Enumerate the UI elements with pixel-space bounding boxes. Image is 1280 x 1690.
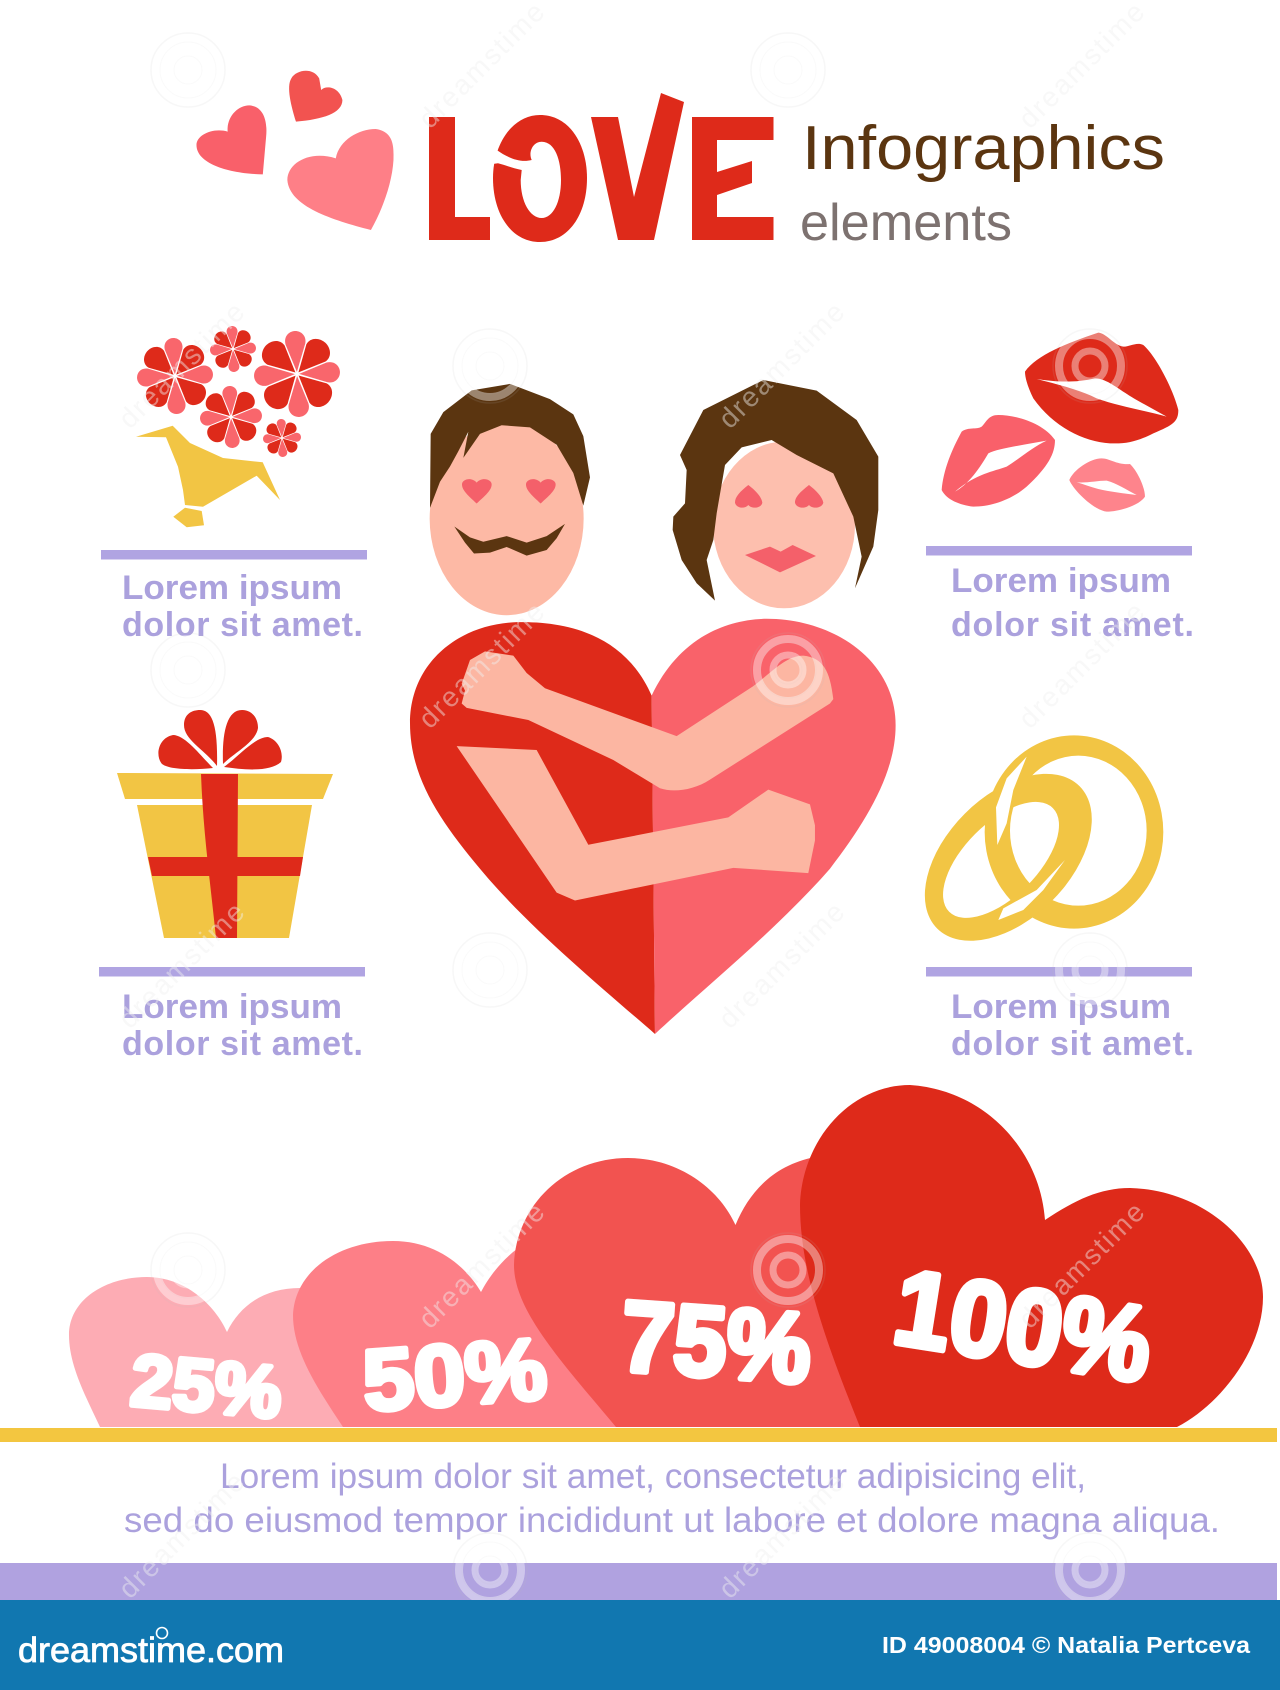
heart 25 xyxy=(69,1277,360,1427)
footer logo: dreamstime.com xyxy=(18,1631,284,1670)
caption: Lorem ipsum xyxy=(122,569,342,607)
subtitle: elements: elements xyxy=(800,194,1012,252)
footer bar xyxy=(0,1600,1280,1690)
panel: gift xyxy=(99,710,365,1063)
title hearts xyxy=(196,71,394,230)
caption: Lorem ipsum xyxy=(122,988,342,1026)
watermark spirals xyxy=(151,33,1127,1607)
watermark text xyxy=(112,0,1152,1604)
divider bar xyxy=(926,967,1192,976)
man head xyxy=(430,384,590,615)
caption: Lorem ipsum xyxy=(951,562,1171,600)
caption xyxy=(951,988,1194,1063)
title: Infographics: Infographics xyxy=(802,114,1165,183)
label: 50%: 50% xyxy=(360,1320,550,1430)
watermark text: dreamstime xyxy=(712,895,852,1034)
icon: wedding rings xyxy=(894,735,1163,972)
icon: flowers xyxy=(135,325,342,458)
arm: upper xyxy=(462,651,833,790)
title: LOVE lettering xyxy=(429,93,774,242)
caption: dolor sit amet. xyxy=(951,1025,1194,1063)
heart body xyxy=(410,619,896,1034)
watermark text: dreamstime xyxy=(112,1465,252,1604)
caption xyxy=(122,569,363,644)
heart 50 xyxy=(293,1240,620,1427)
paragraph: sed do eiusmod tempor incididunt ut labore et dolore magna aliqua. xyxy=(124,1501,1220,1540)
central illustration: hugging couple xyxy=(410,380,896,1034)
divider bar xyxy=(926,546,1192,556)
icon: bouquet wrapper xyxy=(136,426,280,527)
caption: Lorem ipsum xyxy=(951,988,1171,1026)
caption xyxy=(951,562,1194,644)
panel: bouquet xyxy=(101,325,367,644)
label: 25%: 25% xyxy=(128,1338,285,1434)
watermark text: dreamstime xyxy=(412,1195,552,1334)
watermark text: dreamstime xyxy=(712,1465,852,1604)
paragraph xyxy=(124,1457,1220,1540)
divider bar xyxy=(99,967,365,976)
footer credit: ID 49008004 © Natalia Pertceva xyxy=(882,1632,1250,1658)
caption: dolor sit amet. xyxy=(122,1025,363,1063)
baseline bar xyxy=(0,1428,1277,1442)
label: 75%: 75% xyxy=(617,1280,815,1405)
label: 100%: 100% xyxy=(886,1246,1160,1405)
caption: dolor sit amet. xyxy=(122,606,363,644)
watermark text: dreamstime xyxy=(112,295,252,434)
caption xyxy=(122,988,363,1063)
panel: kisses xyxy=(926,333,1194,644)
watermark text: dreamstime xyxy=(1012,595,1152,734)
heart 100 xyxy=(800,1085,1263,1427)
watermark text: dreamstime xyxy=(412,595,552,734)
paragraph: Lorem ipsum dolor sit amet, consectetur adipisicing elit, xyxy=(220,1457,1086,1496)
progress hearts xyxy=(69,1085,1263,1427)
watermark text: dreamstime xyxy=(112,895,252,1034)
lilac band xyxy=(0,1563,1277,1600)
heart 75 xyxy=(514,1157,875,1427)
divider bar xyxy=(101,550,367,560)
icon: lips xyxy=(942,333,1178,512)
woman head xyxy=(673,380,878,608)
caption: dolor sit amet. xyxy=(951,606,1194,644)
icon: gift box xyxy=(117,710,333,938)
arm: lower xyxy=(457,746,815,900)
watermark text: dreamstime xyxy=(1012,1195,1152,1334)
panel: rings xyxy=(894,735,1194,1063)
watermark text: dreamstime xyxy=(712,295,852,434)
